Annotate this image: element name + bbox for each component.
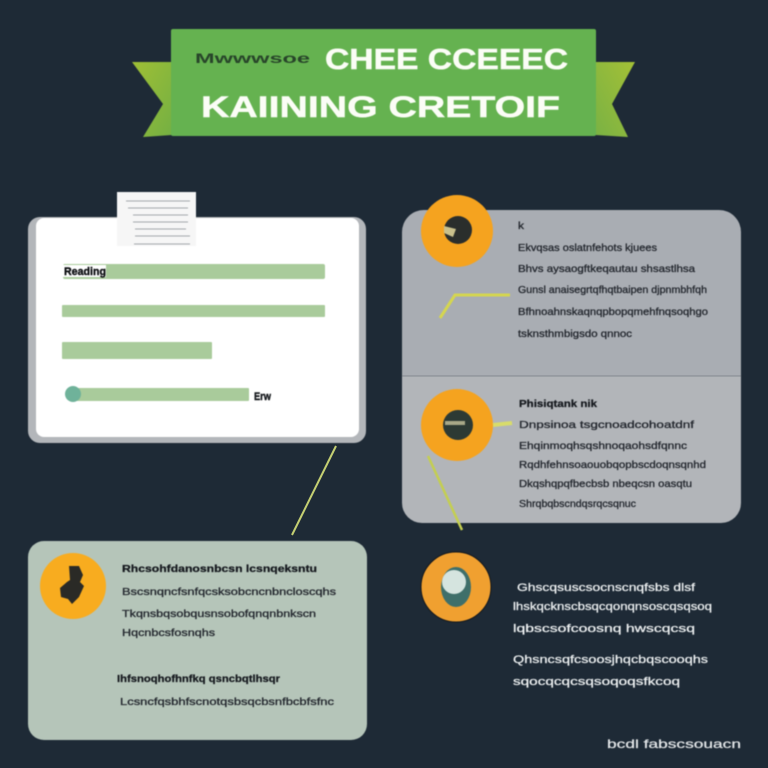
text block (519, 398, 706, 510)
text block: Ghscqsuscsocnscnqfsbs dlsf (517, 582, 696, 594)
text block: Lcsncfqsbhfscnotqsbsqcbsnfbcbfsfnc (120, 696, 334, 708)
text block: Bhvs aysaogftkeqautau shsastlhsa (518, 263, 695, 275)
text block (117, 563, 336, 708)
text block: tsknsthmbigsdo qnnoc (518, 328, 632, 340)
orange badge with icon (421, 389, 493, 461)
title banner (132, 29, 635, 137)
bar four label: Erw (254, 391, 271, 403)
panel: grey middle (402, 376, 741, 530)
left ribbon tail (132, 62, 172, 137)
text block: Qhsncsqfcsoosjhqcbqscooqhs (513, 654, 709, 666)
text block: Dnpsinoa tsgcnoadcohoatdnf (519, 419, 694, 431)
orange badge with icon (40, 553, 106, 619)
text block: Gunsl anaisegrtqfhqtbaipen djpnmbhfqh (518, 284, 707, 296)
text block: Bfhnoahnskaqnqpbopqmehfnqsoqhgo (518, 306, 708, 318)
panel: sage lower left (28, 541, 367, 740)
text block: lqbscsofcoosnq hwscqcsq (513, 623, 695, 635)
orange badge with icon (421, 195, 493, 267)
connector to text (493, 423, 512, 425)
text block: Rqdhfehnsoaouobqopbscdoqnsqnhd (519, 459, 706, 471)
connector arrow (440, 295, 510, 318)
bar three (62, 342, 212, 359)
footer credit: bcdl fabscsouacn (607, 737, 741, 751)
card face (36, 218, 359, 437)
title line one small: Mwwwsoe (195, 50, 310, 66)
bar one (63, 264, 325, 279)
text block (513, 582, 712, 688)
text block: Ihfsnoqhofhnfkq qsncbqtlhsqr (117, 673, 280, 685)
text block: Shrqbqbscndqsrqcsqnuc (519, 498, 636, 510)
orange badge with icon (421, 552, 491, 622)
section: lower right on dark (421, 552, 741, 751)
bar two (62, 305, 325, 317)
connector downward (428, 456, 462, 530)
text block: Ekvqsas oslatnfehots kjuees (518, 242, 657, 254)
text block: sqocqcqcsqsoqoqsfkcoq (513, 676, 680, 688)
card edge (28, 217, 366, 443)
text block: Phisiqtank nik (519, 398, 597, 410)
text block: k (518, 220, 525, 232)
panel: grey top (402, 195, 741, 376)
title line two: KAIINING CRETOIF (201, 91, 560, 124)
paper tab (117, 192, 196, 246)
bar four (70, 388, 249, 401)
text block: Dkqshqpqfbecbsb nbeqcsn oasqtu (519, 478, 692, 490)
text block (518, 220, 708, 340)
right ribbon tail (595, 62, 635, 137)
text block: Rhcsohfdanosnbcsn lcsnqeksntu (122, 563, 317, 575)
text block: Hqcnbcsfosnqhs (122, 627, 215, 639)
text block: lhskqcknscbsqcqonqnsoscqsqsoq (513, 601, 712, 613)
bar four marker (65, 386, 81, 402)
bar one label: Reading (64, 266, 106, 278)
text block: Ehqinmoqhsqshnoqaohsdfqnnc (519, 440, 687, 452)
banner body (171, 29, 596, 136)
title line one large: CHEE CCEEEC (325, 44, 568, 76)
panel: white card (28, 192, 366, 443)
connector: card to lower panel (292, 446, 336, 535)
text block: Bscsnqncfsnfqcsksobcncnbncloscqhs (122, 586, 336, 598)
text block: Tkqnsbqsobqusnsobofqnqnbnkscn (122, 608, 316, 620)
